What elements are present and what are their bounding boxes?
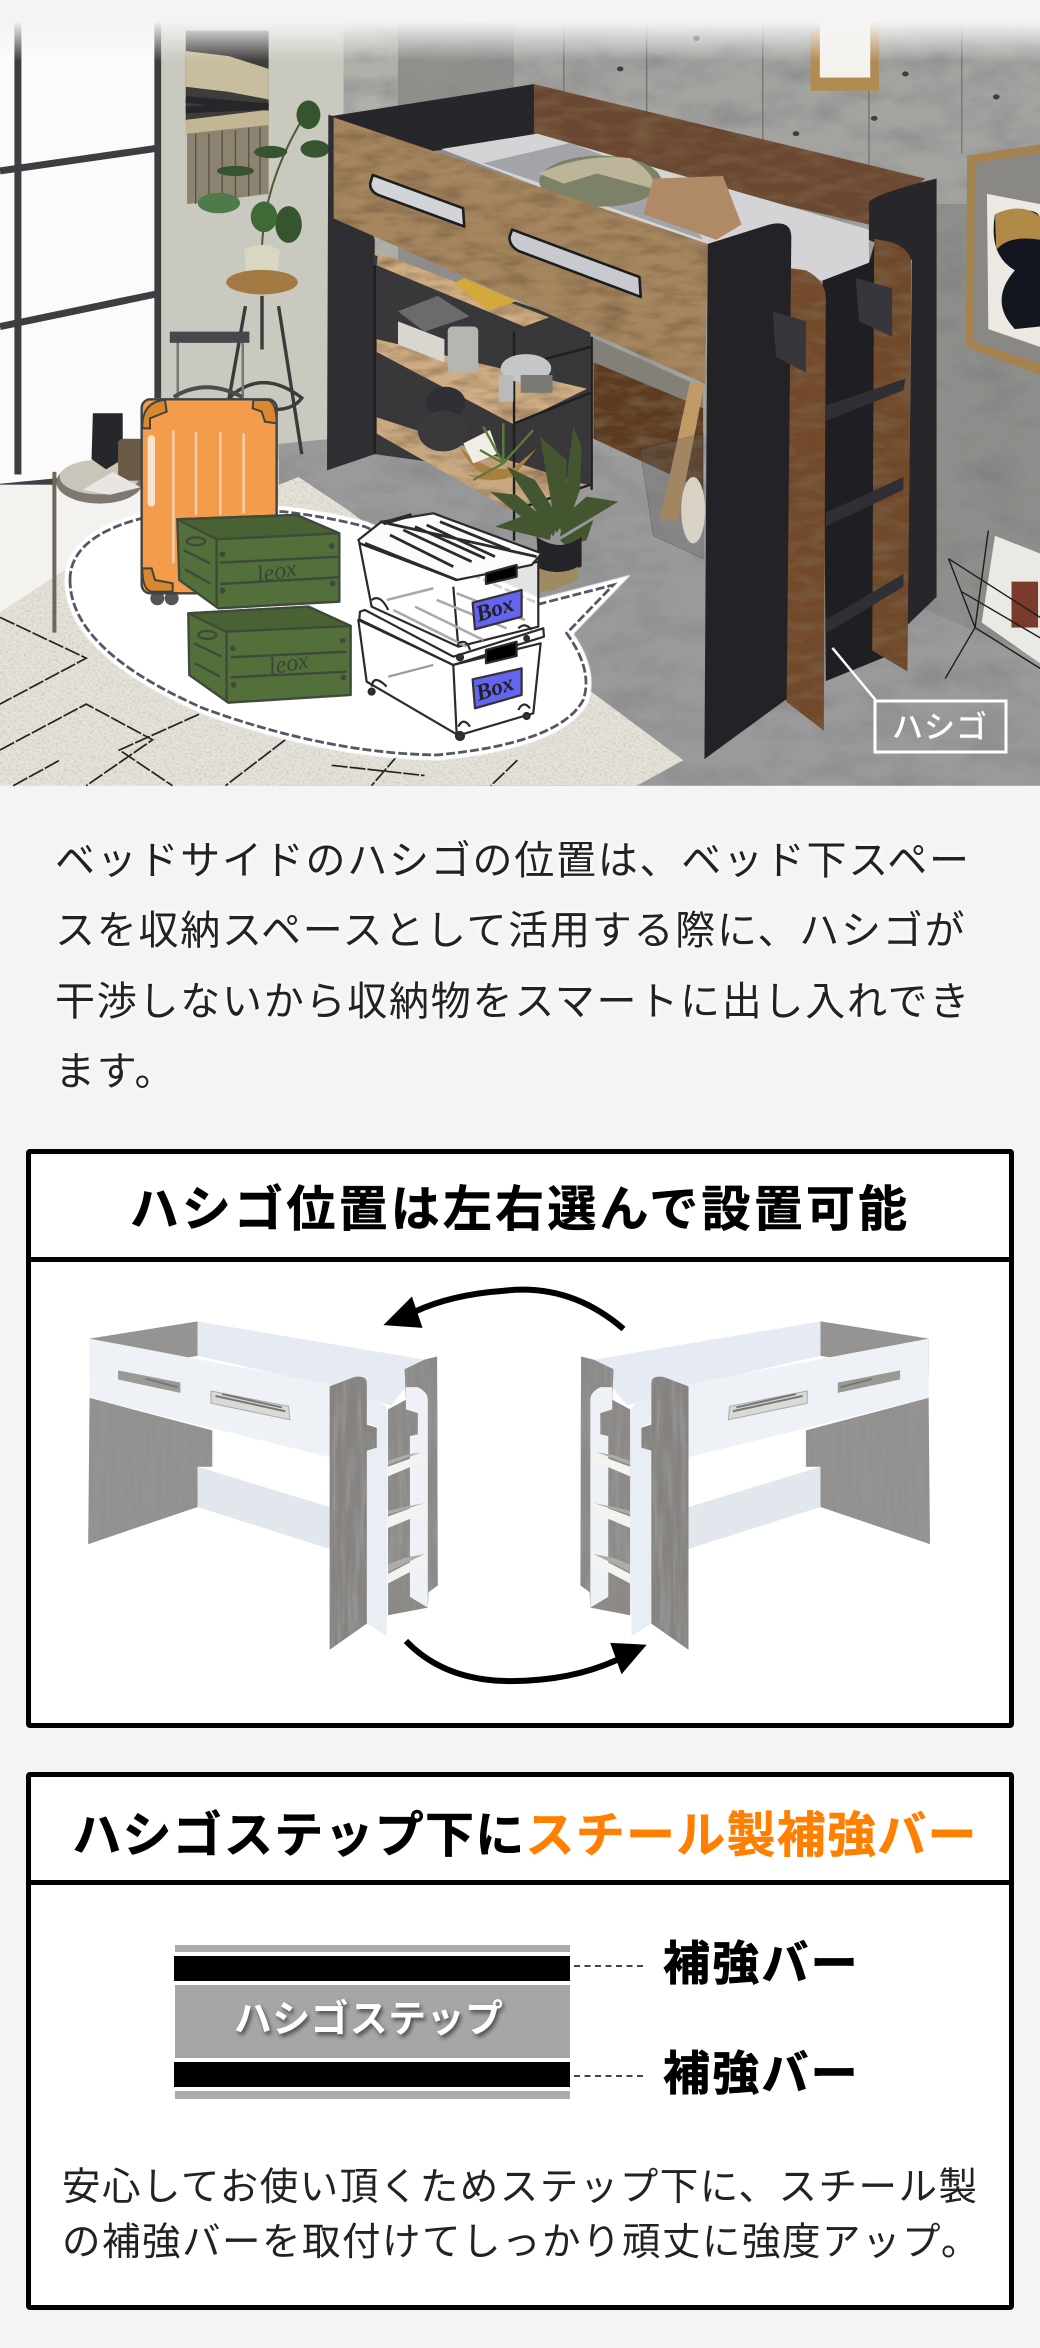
window and left floor bbox=[0, 0, 163, 663]
panel heading: ハシゴステップ下にスチール製補強バー bbox=[72, 1809, 978, 1863]
bed inner black panel bbox=[330, 84, 534, 153]
side table with teapot bbox=[54, 413, 143, 633]
shelf back shadow bbox=[375, 255, 590, 485]
under-bed back wood and wall bbox=[557, 321, 703, 449]
picture frames on wall bbox=[811, 20, 1040, 375]
ladder label bbox=[875, 701, 1006, 752]
bottom grey strip bbox=[175, 2091, 570, 2099]
wall left bbox=[161, 0, 347, 459]
diagram: ladder step cross-section bbox=[174, 1945, 643, 2099]
crate text: handwriting bbox=[255, 556, 311, 680]
arrow: right to left bbox=[383, 1290, 624, 1329]
label: bottom bar: 補強バー bbox=[663, 2047, 860, 2100]
intro paragraph: ます。 bbox=[55, 1050, 176, 1094]
cushion and throw bbox=[539, 156, 661, 207]
label: top bar: 補強バー bbox=[663, 1937, 860, 1990]
ladder inside bbox=[822, 240, 907, 681]
suitcase bbox=[142, 399, 277, 605]
floor bbox=[279, 439, 1040, 786]
front black panel bbox=[704, 223, 791, 759]
top grey strip bbox=[175, 1945, 570, 1952]
panel description text: 安心してお使い頂くためステップ下に、スチール製 bbox=[62, 2166, 979, 2209]
plant on stool bbox=[198, 101, 330, 454]
crate text: handwriting: leox bbox=[267, 648, 311, 680]
bed: ladder on left bbox=[580, 1321, 930, 1650]
bed back wood panel bbox=[534, 84, 925, 224]
ladder steps bbox=[826, 379, 905, 634]
heading divider bbox=[26, 1257, 1014, 1262]
green crate top bbox=[177, 515, 339, 608]
magazine rack bbox=[945, 531, 1040, 679]
ladder step block bbox=[175, 1985, 570, 2058]
concrete walls bbox=[344, 0, 1040, 663]
shelf items bbox=[398, 278, 553, 452]
bed: ladder on right bbox=[88, 1321, 438, 1650]
box label text: handwriting: Box bbox=[472, 591, 517, 627]
intro paragraph bbox=[55, 839, 971, 1094]
callout group drawn from overlay bbox=[70, 399, 618, 755]
bottom steel bar bbox=[174, 2062, 570, 2087]
box label text: handwriting bbox=[472, 591, 517, 706]
panel description text bbox=[62, 2166, 981, 2264]
bed front wood panel bbox=[334, 117, 708, 384]
diagram: mirrored beds with arrows bbox=[88, 1286, 930, 1684]
heading divider bbox=[26, 1880, 1014, 1885]
ladder label: ハシゴ bbox=[892, 710, 988, 745]
rug bbox=[0, 477, 683, 786]
mattress bbox=[441, 134, 869, 281]
intro paragraph: ベッドサイドのハシゴの位置は、ベッド下スペー bbox=[55, 839, 971, 883]
intro paragraph: スを収納スペースとして活用する際に、ハシゴが bbox=[55, 909, 966, 953]
leader line bbox=[832, 648, 876, 700]
panel heading: ハシゴ位置は左右選んで設置可能 bbox=[130, 1183, 910, 1237]
wall tapestry bbox=[186, 31, 269, 204]
rail slots bbox=[370, 175, 641, 297]
bed left black leg bbox=[327, 115, 375, 470]
top steel bar bbox=[174, 1956, 570, 1981]
top fade bbox=[0, 0, 1040, 61]
panel description text: の補強バーを取付けてしっかり頑丈に強度アップ。 bbox=[62, 2221, 981, 2264]
suitcase handle bbox=[170, 332, 249, 398]
hero photo: loft bed with storage callout bbox=[0, 23, 1040, 786]
arrow: left to right bbox=[406, 1641, 647, 1681]
far ladder rail wood bbox=[872, 239, 911, 671]
panel: reinforcing bar bbox=[26, 1772, 1014, 2310]
panel: ladder position bbox=[26, 1149, 1014, 1728]
fern plant bbox=[490, 427, 618, 592]
plastic box top bbox=[358, 513, 542, 650]
crate text: handwriting: leox bbox=[255, 556, 299, 588]
callout bubble dashed outline bbox=[70, 511, 613, 755]
dashed leader top bbox=[574, 1965, 643, 1967]
green crate bottom bbox=[188, 607, 351, 703]
near ladder rail wood bbox=[786, 268, 826, 731]
intro paragraph: 干渉しないから収納物をスマートに出し入れでき bbox=[55, 980, 971, 1024]
leaning wood stick and wire basket bbox=[640, 383, 705, 559]
callout bubble glow bbox=[70, 511, 613, 755]
dashed leader bottom bbox=[574, 2075, 643, 2077]
box label text: handwriting: Box bbox=[472, 670, 517, 706]
back ladder black panel bbox=[869, 179, 937, 625]
ladder step block: ハシゴステップ bbox=[234, 1999, 503, 2041]
basket plant bbox=[460, 423, 537, 480]
shelf boards bbox=[375, 253, 592, 541]
ladder brackets bbox=[773, 278, 892, 372]
plastic box bottom bbox=[358, 610, 544, 740]
